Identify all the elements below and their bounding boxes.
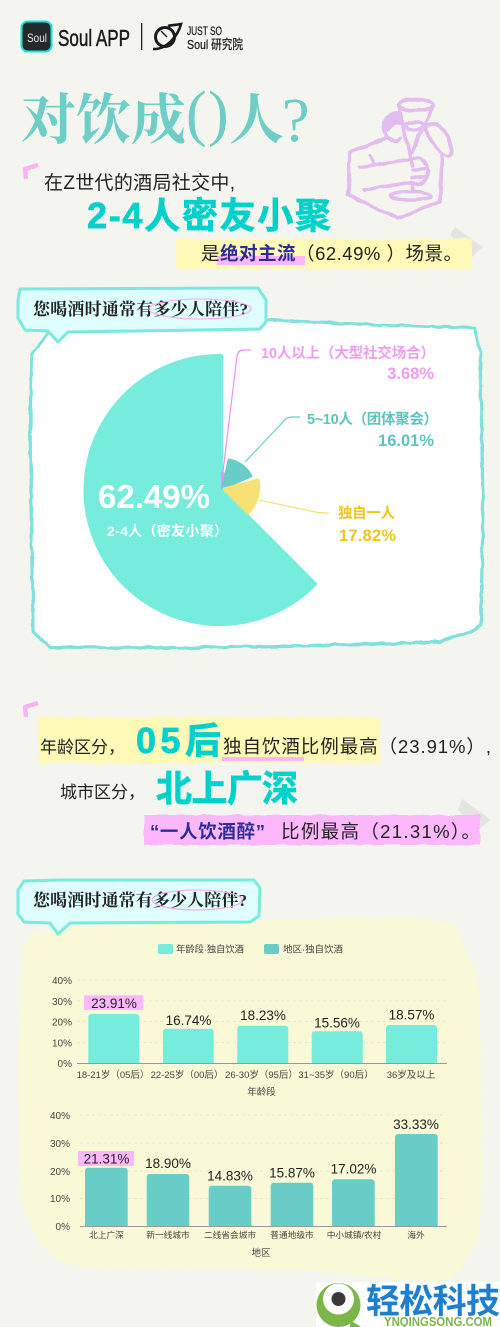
bar chart: age group: 31~35岁（90后）: [298, 1069, 374, 1081]
bar chart: region: 0%: [56, 1222, 70, 1233]
callout: drinking alone in tier-1 cities: “一人饮酒醉”: [150, 821, 265, 842]
callout: dominant scenario: 是绝对主流（62.49% ）场景。: [201, 243, 462, 264]
pie slice: 10+ people: [222, 473, 226, 489]
pie label: alone: 独自一人: [338, 504, 396, 522]
title: ?: [282, 87, 310, 155]
title: [21, 76, 310, 155]
header logos: [22, 22, 243, 52]
intro line: 在Z世代的酒局社交中,: [44, 172, 235, 194]
callout: age group: 05后: [136, 720, 221, 761]
legend: [158, 944, 343, 956]
bar chart: age group: 18-21岁（05后）: [77, 1069, 149, 1081]
bar chart: region: 15.87%: [269, 1166, 315, 1180]
bar chart: age group: 18.23%: [240, 1008, 286, 1023]
bar chart: region: 中小城镇/农村: [327, 1229, 382, 1240]
title: (: [186, 80, 207, 148]
pie label: 5-10: 5~10人（团体聚会）: [307, 410, 438, 428]
research institute name: JUST SO: [187, 24, 222, 38]
bar chart: age group: 23.91%: [91, 996, 137, 1011]
pie label: alone: 17.82%: [339, 527, 396, 545]
speech bubble 1: [18, 288, 266, 342]
headline: 2-4 person gatherings: 2-4人密友小聚: [87, 195, 331, 236]
callout: age group: 年龄区分，: [40, 738, 125, 757]
icon: orbit logo: [153, 24, 181, 49]
bar chart: age group: 年龄段: [247, 1086, 276, 1098]
panel: bar charts: [18, 917, 482, 1283]
bar chart: region: 20%: [50, 1167, 70, 1178]
brand name: Soul APP: [58, 25, 130, 51]
bar chart: region: 40%: [50, 1111, 70, 1122]
research institute name: [187, 24, 243, 52]
bar chart: region: 新一线城市: [146, 1229, 190, 1240]
illustration: hand holding glass: [348, 100, 453, 218]
tape: [458, 799, 491, 830]
icon: green eye logo: [316, 1283, 361, 1327]
bar chart: age group: 10%: [52, 1038, 72, 1050]
icon: Soul app logo: [22, 22, 52, 52]
bar chart: region: 17.02%: [331, 1162, 376, 1176]
pie label: 10+: 3.68%: [387, 365, 434, 383]
title: 人: [229, 76, 284, 155]
pie slice: 2-4 people: [86, 356, 315, 624]
bar chart: region: 10%: [50, 1194, 70, 1205]
bar chart: age group: 0%: [58, 1059, 72, 1070]
panel: pie chart: [30, 320, 483, 648]
bar chart: region: 二线省会城市: [204, 1229, 256, 1240]
bar chart: region: 18.90%: [145, 1156, 191, 1171]
bar chart: age group: 18.57%: [389, 1008, 434, 1022]
bar chart: age group: 22-25岁（00后）: [151, 1069, 223, 1081]
pie label: 62.49%: 2-4人（密友小聚）: [107, 523, 228, 539]
legend: 年龄段·独自饮酒: [176, 944, 244, 956]
bar chart: age group: 15.56%: [314, 1016, 360, 1030]
pie label: 62.49%: [98, 478, 228, 539]
bar chart: age group: 26-30岁（95后）: [225, 1069, 298, 1081]
bar chart: region: 14.83%: [207, 1168, 253, 1184]
speech bubble 2: 您喝酒时通常有多少人陪伴?: [33, 890, 247, 910]
callout: city tier: [60, 768, 298, 809]
bar chart: age group: 30%: [52, 997, 72, 1008]
pie slice: 5-10 people: [223, 460, 251, 488]
icon: Soul app logo: Soul: [27, 31, 47, 45]
bar chart: region: 21.31%: [84, 1152, 129, 1166]
bar chart: age group: 20%: [52, 1018, 72, 1028]
bar chart: region: 地区: [251, 1247, 271, 1259]
callout: city tier: 北上广深: [156, 768, 298, 809]
callout: drinking alone in tier-1 cities: 比例最高（21.31%）。: [281, 821, 480, 842]
pie slice: alone: [224, 480, 259, 513]
bar chart: region: 30%: [50, 1139, 70, 1150]
legend: 地区·独自饮酒: [283, 944, 343, 956]
pie label: 62.49%: 62.49%: [98, 478, 210, 515]
leader lines: [222, 350, 329, 513]
watermark: 轻松科技: [366, 1283, 500, 1321]
bar chart: region: 北上广深: [89, 1229, 124, 1240]
bar chart: age group: [52, 976, 447, 1098]
pie label: 5-10: [307, 410, 438, 450]
decorative tick mark: [25, 703, 38, 717]
title: 对饮成: [21, 76, 186, 155]
bar chart: region: 普通地级市: [270, 1229, 314, 1240]
bar chart: age group: 16.74%: [166, 1013, 211, 1028]
bar chart: age group: 40%: [52, 976, 72, 987]
callout: city tier: 城市区分，: [60, 783, 145, 802]
callout: dominant scenario: [176, 239, 472, 269]
speech bubble 1: 您喝酒时通常有多少人陪伴?: [33, 299, 248, 319]
bar chart: region: 33.33%: [393, 1117, 439, 1132]
callout: age group: [38, 717, 491, 763]
pie label: 10+: 10人以上（大型社交场合）: [261, 344, 435, 362]
pie label: 10+: [261, 344, 435, 383]
callout: drinking alone in tier-1 cities: [144, 815, 480, 845]
callout: age group: 独自饮酒比例最高（23.91%）,: [223, 736, 491, 757]
bar chart: region: [50, 1111, 447, 1259]
pie label: alone: [338, 504, 396, 545]
title: ): [208, 80, 229, 148]
research institute name: Soul 研究院: [187, 37, 243, 52]
decorative tick mark: [25, 165, 38, 179]
speech bubble 2: [18, 880, 260, 934]
watermark: [316, 1282, 500, 1327]
bar chart: age group: 36岁及以上: [387, 1069, 436, 1081]
bar chart: region: 海外: [407, 1229, 425, 1240]
tape: [450, 227, 483, 257]
pie label: 5-10: 16.01%: [378, 432, 434, 450]
